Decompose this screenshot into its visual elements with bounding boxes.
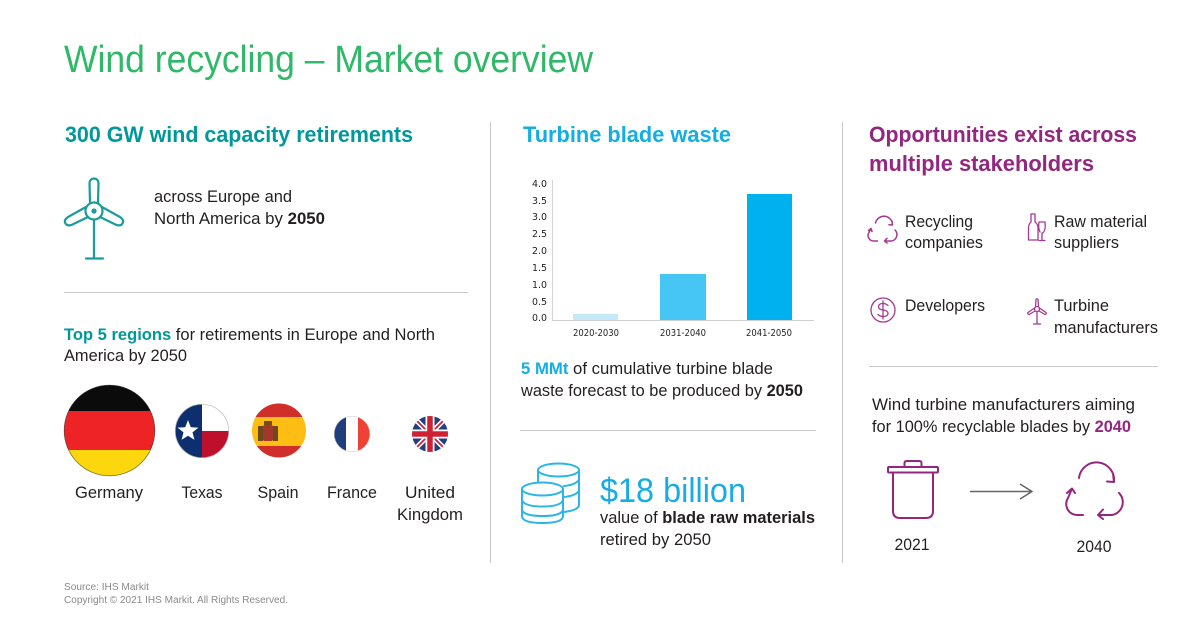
text: across Europe and North America: North America by 2050: [154, 209, 325, 228]
flag: Texas: Texas: [182, 483, 222, 502]
label: 2021: 2021: [894, 535, 930, 554]
flag: Texas: [175, 404, 229, 502]
icon: recycle small: [868, 216, 897, 243]
flag: United Kingdom: Kingdom: [397, 505, 463, 524]
source note: [64, 582, 288, 606]
source note: Copyright © 2021 IHS Markit. All Rights Reserved.: [64, 595, 288, 606]
x axis labels: 2020-2030: [573, 328, 619, 339]
text: across Europe and North America: [154, 187, 325, 228]
heading: opportunities: [869, 122, 1137, 176]
stakeholder: raw material suppliers: [1028, 212, 1147, 252]
stakeholder: recycling companies: [868, 212, 983, 252]
label: 2040: 2040: [1076, 537, 1112, 556]
arrow: [970, 484, 1032, 499]
text: top 5 regions: Top 5 regions for retirements in Europe and North: [64, 325, 435, 344]
panel: wind capacity retirements: [60, 122, 468, 524]
flag: Germany: [60, 384, 160, 502]
flag: United Kingdom: [397, 416, 463, 524]
stakeholder: developers: Developers: [905, 296, 985, 315]
stakeholder: turbine manufacturers: [1028, 296, 1158, 337]
stat: 18 billion: [600, 472, 815, 549]
stakeholder: turbine manufacturers: manufacturers: [1054, 318, 1158, 337]
flag: Spain: Spain: [258, 483, 298, 502]
icon: trash bin: [888, 461, 938, 518]
stakeholder: recycling companies: Recycling: [905, 212, 973, 231]
x axis labels: 2041-2050: [746, 328, 792, 339]
y axis labels: 2.0: [532, 246, 547, 257]
text: manufacturers aiming: Wind turbine manufacturers aiming: [872, 395, 1135, 414]
icon: wind turbine: [65, 178, 123, 258]
text: 5 MMt forecast: waste forecast to be produced by 2050: [520, 381, 803, 400]
icon: dollar: [871, 298, 895, 322]
source note: Source: IHS Markit: [64, 582, 149, 593]
title: Wind recycling – Market overview: [64, 39, 594, 81]
stakeholder: raw material suppliers: Raw material: [1054, 212, 1147, 231]
icon: small turbine: [1028, 299, 1046, 324]
icon: bottle and glass: [1028, 214, 1045, 240]
text: 5 MMt forecast: 5 MMt of cumulative turbine blade: [521, 359, 773, 378]
text: across Europe and North America: across Europe and: [154, 187, 292, 206]
flag: Spain: [252, 404, 306, 502]
heading: opportunities: Opportunities exist across: [869, 122, 1137, 147]
y axis labels: 3.0: [532, 212, 547, 223]
heading: opportunities: multiple stakeholders: [869, 151, 1094, 176]
flag: United Kingdom: United: [405, 483, 455, 502]
stat: 18 billion: value of blade raw materials: [600, 508, 815, 527]
y axis labels: 3.5: [532, 196, 547, 207]
bars: [573, 194, 792, 320]
stakeholder: raw material suppliers: suppliers: [1054, 233, 1119, 252]
panel: turbine blade waste: [520, 122, 816, 549]
x axis labels: [573, 328, 792, 339]
y axis labels: 1.0: [532, 280, 547, 291]
flag: Germany: Germany: [75, 483, 143, 502]
flag: France: [327, 416, 377, 502]
stakeholder: recycling companies: companies: [905, 233, 983, 252]
stat: 18 billion: $18 billion: [600, 472, 746, 510]
y axis labels: 0.5: [532, 297, 547, 308]
text: manufacturers aiming: [872, 395, 1135, 436]
heading: turbine blade waste: Turbine blade waste: [523, 122, 731, 147]
flag: France: France: [327, 483, 377, 502]
y axis labels: [532, 179, 547, 324]
stat: 18 billion: retired by 2050: [600, 530, 711, 549]
x axis labels: 2031-2040: [660, 328, 706, 339]
y axis labels: 4.0: [532, 179, 547, 190]
y axis labels: 0.0: [532, 313, 547, 324]
stakeholder: turbine manufacturers: Turbine: [1054, 296, 1109, 315]
y axis labels: 1.5: [532, 263, 547, 274]
text: 5 MMt forecast: [520, 359, 803, 400]
icon: recycle: [1066, 462, 1123, 519]
panel: opportunities: [868, 122, 1158, 556]
y axis labels: 2.5: [532, 229, 547, 240]
heading: 300 GW retirements: 300 GW wind capacity retirements: [65, 122, 413, 147]
bar chart: blade waste by decade: [532, 179, 814, 339]
icon: stacked coins: [522, 464, 579, 523]
text: manufacturers aiming: for 100% recyclable blades by 2040: [872, 417, 1131, 436]
stakeholder: developers: [871, 296, 985, 322]
text: top 5 regions: [64, 325, 435, 365]
text: top 5 regions: America by 2050: [64, 346, 187, 365]
